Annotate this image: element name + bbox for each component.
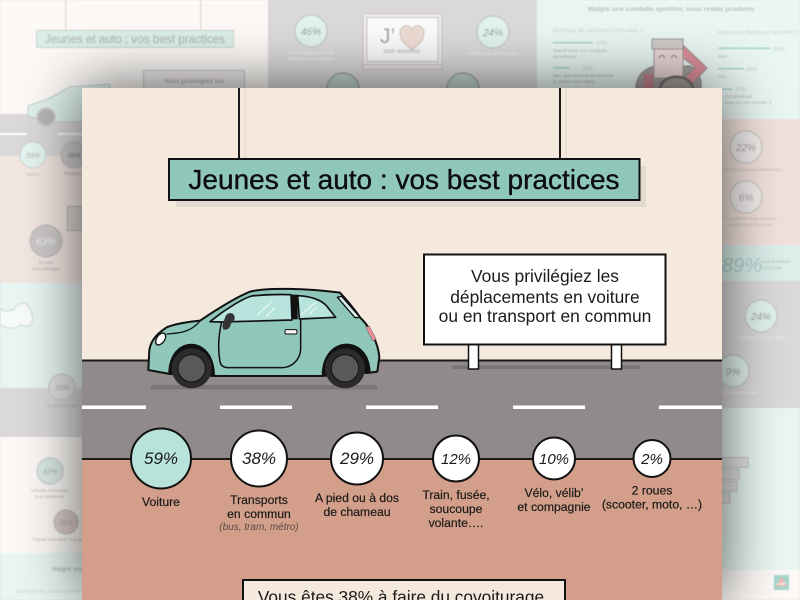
faded stat: 22 <box>722 131 783 172</box>
faded chart: accident: Avez-vous déjà eu un accident ? <box>717 30 798 36</box>
stat: 2 roues: 2% <box>640 451 663 468</box>
roadside billboard: déplacements en voiture <box>450 287 640 307</box>
faded stat: 9 bottom: Envoyez un mail <box>723 390 757 395</box>
faded stat: 26: Piquée à ta mère / ton père <box>33 537 88 542</box>
faded stat: 9 <box>447 73 479 105</box>
stat: a pied: 29% <box>339 449 374 468</box>
faded chart: accident: 63% <box>774 47 785 53</box>
stat: train: soucoupe <box>430 502 483 516</box>
wing mirror <box>223 313 235 330</box>
stat: transports en commun: (bus, tram, métro) <box>219 522 299 533</box>
faded chart: conducteur: 30% <box>582 66 593 72</box>
rear wheel <box>325 348 365 388</box>
faded laptop: mon assureur <box>384 49 420 55</box>
stat: transports en commun: en commun <box>227 507 291 521</box>
faded chart: accident: Non <box>718 54 727 60</box>
faded heading: conduite sportive: Malgré une conduite sportive, vous restez prudents <box>588 6 754 13</box>
faded stat: 23 <box>47 374 78 408</box>
roadside billboard: Vous privilégiez les <box>471 266 619 286</box>
faded stat: 24 top: 24% <box>482 28 503 39</box>
stat: a pied: A pied ou à dos <box>315 491 399 505</box>
faded stat: 24 bottom: Préférez le voir en direct <box>737 335 786 340</box>
hood crease <box>167 321 200 334</box>
window glints <box>257 301 317 316</box>
faded chart: conducteur: Quel type de conducteur êtes-vous ? <box>553 28 644 34</box>
stat: transports en commun: 38% <box>242 449 276 468</box>
faded stat: 6: un petit coup de pouce <box>727 222 773 227</box>
icon: car <box>148 289 379 389</box>
faded title <box>36 30 234 48</box>
stat: train: 12% <box>441 451 471 468</box>
panel: faded left column <box>0 0 268 600</box>
faded stat: 26: 26% <box>58 520 73 527</box>
faded stat: transports: Transports <box>63 171 85 176</box>
carpooling callout <box>243 580 565 600</box>
faded stat: 22: 22% <box>735 143 756 154</box>
stat: transports en commun <box>219 430 299 533</box>
faded callout box <box>68 206 108 230</box>
wheel arches <box>168 344 371 376</box>
stat: 2 roues: (scooter, moto, …) <box>602 498 702 512</box>
faded stat: 16 <box>327 73 359 105</box>
faded car <box>28 84 110 126</box>
faded bar chart <box>715 458 748 504</box>
stat: a pied: de chameau <box>323 505 391 519</box>
faded logo: MAIF <box>777 582 787 586</box>
faded chart: accident <box>717 30 798 106</box>
faded chart: conducteur: je garde mon calme <box>552 79 595 85</box>
front wheel <box>172 348 212 388</box>
faded stat: passager: que passager <box>32 266 60 271</box>
faded stat: transports: 38% <box>67 153 81 160</box>
faded stat: 24 bottom <box>737 300 786 340</box>
faded stat: 24 bottom: 24% <box>750 312 771 323</box>
stat: voiture: Voiture <box>142 495 180 509</box>
stat: transports en commun: Transports <box>230 493 288 507</box>
title: Jeunes et auto : vos best practices <box>188 164 620 195</box>
faded stat: 23: 18 ans tout pile <box>47 403 78 408</box>
headlight <box>154 331 168 347</box>
faded stat: 46: affaire à votre assureur <box>288 56 335 61</box>
faded logo <box>774 575 789 590</box>
front window <box>210 295 292 322</box>
faded stat: passager <box>30 225 62 271</box>
faded heading: bottom left <box>16 567 111 595</box>
car shadow <box>151 385 377 389</box>
faded stat: 89: 89% <box>722 255 762 277</box>
faded heading: bottom left: Malgré une conduite <box>52 567 111 573</box>
faded sign <box>144 70 244 110</box>
faded stat: 46: 46% <box>301 27 321 38</box>
faded stat: 9 bottom: 9% <box>726 367 740 378</box>
faded chart: accident: Oui <box>718 74 725 80</box>
faded stat: 89 <box>722 255 792 277</box>
door handle <box>285 330 297 334</box>
stat: voiture: 59% <box>144 449 178 468</box>
rear quarter glass <box>337 296 360 318</box>
faded chart: conducteur: Zen, peu importe la situation <box>553 73 614 79</box>
stat: 2 roues <box>602 440 702 512</box>
faded stat: 46: Ne souhaitez pas avoir <box>288 50 334 55</box>
stat: voiture <box>131 428 191 509</box>
faded heading: bottom left: Quel type de conducteur êtes-vous ? <box>16 589 98 595</box>
panel: faded middle column <box>268 0 537 600</box>
panel: faded right column <box>537 0 800 600</box>
faded stat: 89: Vous la trouvez <box>760 259 792 264</box>
faded stat: 24 top: Préférez le voir en direct <box>469 51 518 56</box>
stat: velo: 10% <box>539 451 569 468</box>
panel: road <box>82 360 722 460</box>
sign hanging cables <box>238 88 567 159</box>
faded stat: 42 <box>31 458 70 499</box>
faded stat: 6: 6% <box>739 193 753 204</box>
faded stat: 89: à prix juste <box>760 265 782 270</box>
roadside billboard <box>424 254 666 369</box>
door outline <box>219 320 301 368</box>
faded chart: conducteur: Sportif avec une conduite <box>553 48 607 54</box>
faded stat: 9 bottom <box>717 355 757 395</box>
faded stat: voiture: 59% <box>26 153 40 160</box>
faded stat: transports <box>61 142 87 176</box>
faded sign: Vous privilégiez les <box>164 78 224 85</box>
faded chart: conducteur: dynamique <box>553 54 577 60</box>
rear window <box>298 296 336 319</box>
faded chart: conducteur: 47% <box>596 41 607 47</box>
faded illustration: driver <box>636 39 707 88</box>
door pillar <box>292 295 298 319</box>
faded chart: accident: 11% <box>735 87 746 93</box>
faded stat: 23: 23% <box>54 385 69 392</box>
faded stat: 42: 42% <box>43 469 57 476</box>
panel: sky <box>82 88 722 361</box>
faded stat: 42: à un particulier <box>35 494 65 499</box>
faded stat: 6: Vos parents vous donnent <box>724 216 777 221</box>
stat: velo: Vélo, vélib’ <box>525 486 583 500</box>
faded laptop <box>362 14 442 70</box>
stat: train: Train, fusée, <box>422 488 490 502</box>
faded stat: 6 <box>724 181 777 227</box>
stat: velo <box>517 438 591 514</box>
stat: a pied <box>315 432 399 519</box>
faded chart: conducteur <box>552 28 644 85</box>
stat: train: volante…. <box>429 516 483 530</box>
car body <box>148 289 379 376</box>
faded stat: 26 <box>33 510 88 542</box>
stat: velo: et compagnie <box>517 500 591 514</box>
panel: main poster with drop shadow <box>82 88 722 600</box>
roadside billboard: ou en transport en commun <box>439 306 651 326</box>
faded stat: 24 top <box>469 16 518 56</box>
faded title: Jeunes et auto : vos best practices <box>45 33 225 46</box>
panel: ground <box>82 458 722 600</box>
faded chart: accident: 26% <box>745 67 757 73</box>
faded stat: 46 <box>288 15 335 61</box>
faded cloud <box>0 303 33 328</box>
faded stat: voiture <box>20 142 46 177</box>
faded chart: accident: mais j'ai une excuse ;) <box>724 100 772 106</box>
stat: train <box>422 436 490 530</box>
faded stat: passager: 63% <box>36 237 56 248</box>
faded stat: 42: Achetée d'occasion <box>31 488 70 493</box>
tail light <box>366 326 376 341</box>
faded stat: passager: En tant <box>39 260 54 265</box>
faded laptop: J’ <box>380 25 395 48</box>
stat: 2 roues: 2 roues <box>632 484 672 498</box>
title <box>169 159 646 207</box>
faded chart: accident: Oui plusieurs <box>724 94 753 100</box>
faded stat: 22: Parents la payent entièrement <box>722 167 783 172</box>
faded stat: voiture: Voiture <box>26 172 40 177</box>
